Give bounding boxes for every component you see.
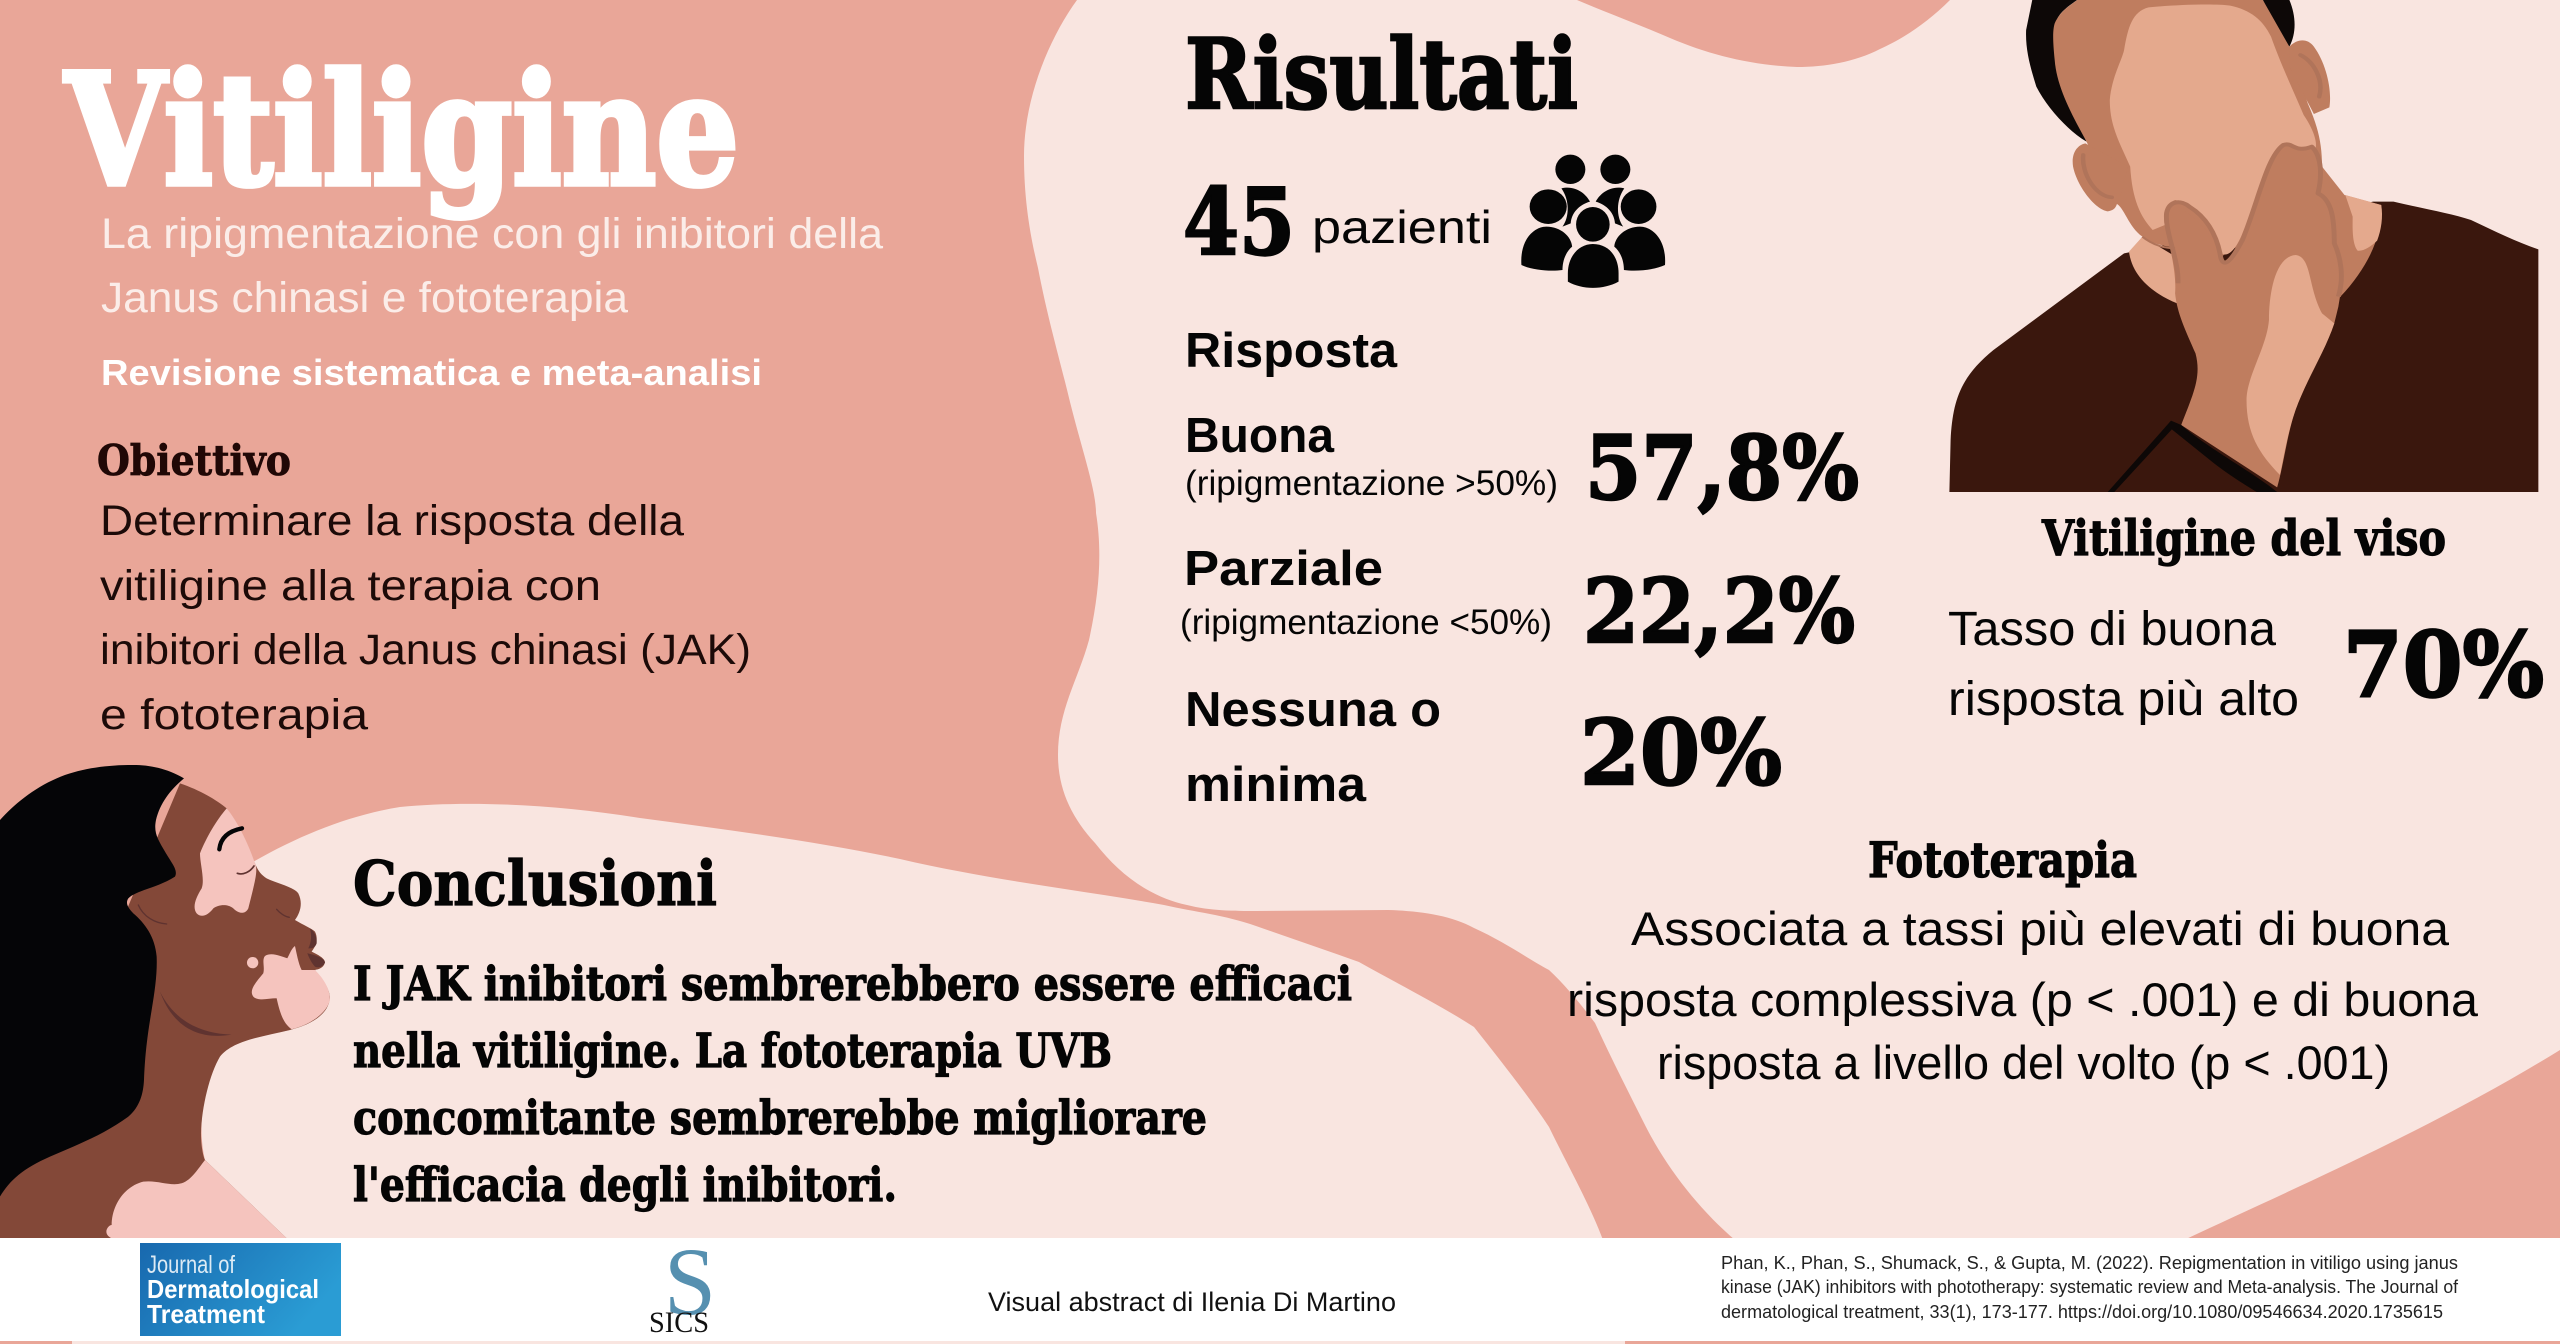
title: Vitiligine: [64, 40, 739, 221]
woman skin: [0, 783, 330, 1238]
citation: dermatological treatment, 33(1), 173-177. https://doi.org/10.1080/09546634.2020.1735615: [1721, 1302, 2443, 1322]
facial vitiligo result: risposta più alto: [1948, 673, 2299, 726]
response row: none or minimal: [1185, 683, 1782, 812]
credit: Visual abstract di Ilenia Di Martino: [988, 1287, 1396, 1317]
objective text: inibitori della Janus chinasi (JAK): [100, 626, 751, 674]
heading: phototherapy: Fototerapia: [1868, 831, 2137, 889]
heading: conclusions: Conclusioni: [353, 847, 717, 920]
woman hair: [0, 765, 184, 1197]
facial vitiligo result: [1948, 603, 2544, 726]
patients count: pazienti: [1312, 201, 1492, 253]
citation: Phan, K., Phan, S., Shumack, S., & Gupta, M. (2022). Repigmentation in vitiligo using janus: [1721, 1253, 2458, 1273]
response row: partial: (ripigmentazione <50%): [1180, 603, 1552, 642]
logo: SICS: SICS: [649, 1306, 709, 1339]
phototherapy text: risposta complessiva (p < .001) e di buona: [1567, 973, 2479, 1026]
citation: [1721, 1253, 2459, 1322]
man shirt: [1949, 202, 2538, 492]
response row: partial: 22,2%: [1583, 559, 1855, 663]
patients count: [1183, 168, 1492, 276]
response row: none or minimal: 20%: [1580, 700, 1782, 806]
man light patch on arm: [2247, 255, 2334, 475]
woman lips: [307, 928, 325, 967]
response row: partial: [1180, 542, 1855, 663]
logo: Journal of Dermatological Treatment: [140, 1243, 341, 1336]
woman nostril and ear lines: [138, 905, 289, 924]
woman chin patch: [252, 946, 330, 1029]
objective text: vitiligine alla terapia con: [100, 562, 601, 610]
heading: response: Risposta: [1185, 324, 1398, 378]
logo: Journal of Dermatological Treatment: Journal of: [147, 1251, 235, 1279]
icon: group of people: [1521, 155, 1665, 288]
logo: SICS: S: [664, 1228, 716, 1335]
phototherapy text: Associata a tassi più elevati di buona: [1631, 902, 2450, 955]
man neck: [2129, 237, 2181, 303]
man head: [2053, 0, 2322, 267]
man ears: [2073, 40, 2330, 211]
phototherapy text: risposta a livello del volto (p < .001): [1657, 1036, 2390, 1089]
heading: results: Risultati: [1185, 18, 1578, 131]
response row: partial: Parziale: [1184, 542, 1383, 596]
response row: good: [1185, 409, 1859, 520]
man hair: [2026, 0, 2295, 142]
phototherapy text: [1567, 902, 2479, 1089]
facial vitiligo result: 70%: [2343, 612, 2544, 718]
woman chest patch: [106, 1160, 287, 1238]
response row: good: (ripigmentazione >50%): [1185, 464, 1558, 503]
panel: conclusions background blob: [202, 804, 1603, 1240]
objective text: Determinare la risposta della: [100, 497, 684, 545]
heading: objective: Obiettivo: [97, 436, 291, 485]
conclusions text: I JAK inibitori sembrerebbero essere efficaci: [353, 957, 1352, 1012]
woman eye: [237, 866, 254, 874]
footer band: [0, 1238, 2560, 1344]
facial vitiligo result: Tasso di buona: [1948, 603, 2276, 656]
illustration: woman with vitiligo in profile: [0, 765, 330, 1238]
man finger outlines: [2166, 144, 2341, 297]
citation: kinase (JAK) inhibitors with phototherapy: systematic review and Meta-analysis. The Journal of: [1721, 1277, 2459, 1297]
conclusions text: nella vitiligine. La fototerapia UVB: [353, 1024, 1112, 1079]
logo: Journal of Dermatological Treatment: Dermatological: [147, 1274, 319, 1304]
panel: results background blob: [1024, 0, 2560, 1240]
logo: Journal of Dermatological Treatment: Treatment: [147, 1299, 265, 1329]
illustration: man with vitiligo on the face: [1949, 0, 2538, 492]
heading: facial vitiligo: Vitiligine del viso: [2041, 509, 2446, 567]
response row: none or minimal: Nessuna o: [1185, 683, 1441, 737]
objective text: [100, 497, 751, 739]
response row: none or minimal: minima: [1185, 758, 1367, 812]
conclusions text: [353, 957, 1352, 1213]
conclusions text: l'efficacia degli inibitori.: [353, 1158, 897, 1213]
woman jaw shadow: [160, 992, 232, 1036]
man hand and arm: [2165, 146, 2342, 487]
response row: good: 57,8%: [1585, 416, 1859, 520]
objective text: e fototerapia: [100, 691, 368, 739]
patients count: 45: [1183, 168, 1295, 276]
study type: Revisione sistematica e meta-analisi: [101, 352, 762, 393]
conclusions text: concomitante sembrerebbe migliorare: [353, 1091, 1207, 1146]
man shirt collar: [2108, 421, 2277, 492]
subtitle: La ripigmentazione con gli inibitori della: [101, 210, 883, 258]
response row: good: Buona: [1185, 409, 1335, 463]
subtitle: Janus chinasi e fototerapia: [101, 274, 628, 322]
man light facial area: [2110, 5, 2316, 254]
subtitle: [101, 210, 883, 322]
woman forehead patch: [195, 808, 256, 916]
woman eyebrow: [219, 828, 242, 849]
